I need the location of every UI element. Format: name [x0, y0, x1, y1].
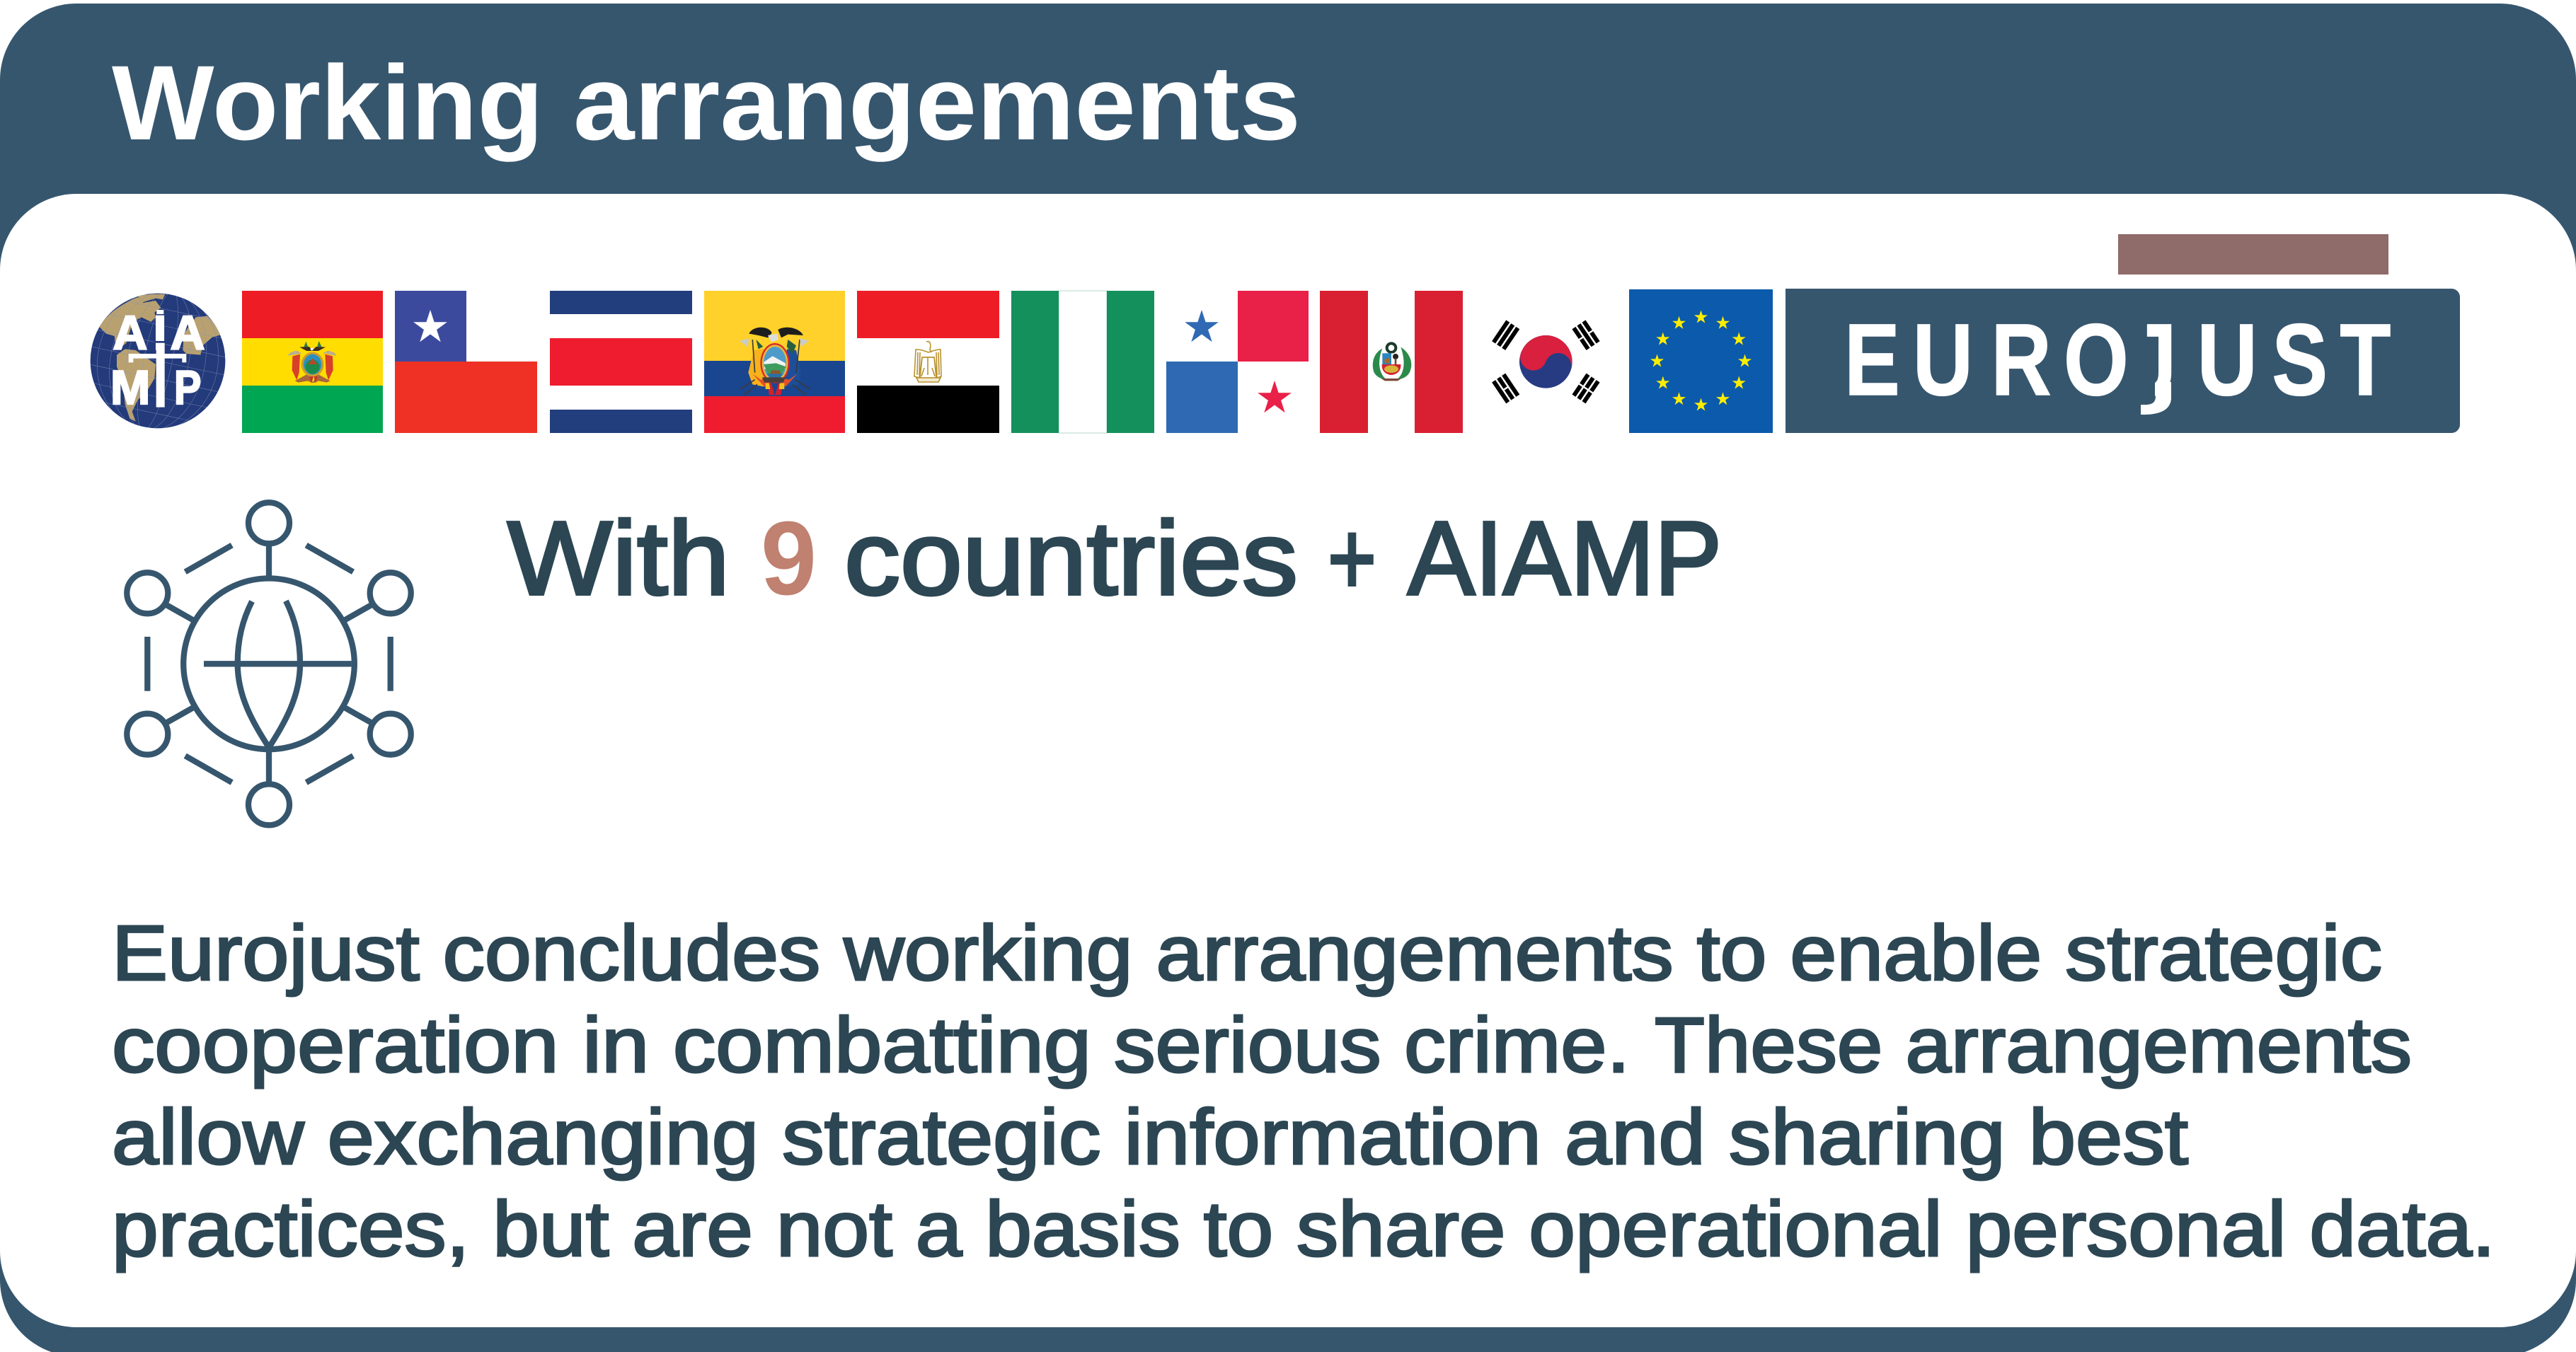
- body text: allow exchanging strategic information and sharing best: [112, 1094, 2188, 1181]
- logo letters: AIA: [113, 306, 205, 359]
- flag: Panama: [1166, 291, 1309, 433]
- emblem: Peru: [1373, 343, 1411, 381]
- emblem: Bolivia: [288, 341, 336, 383]
- trigrams: [1492, 320, 1600, 403]
- logo letters: P: [174, 362, 201, 415]
- body text: cooperation in combatting: [112, 1002, 1091, 1089]
- heading: with 9 countries + AIAMP: 9: [761, 500, 817, 617]
- heading: with 9 countries + AIAMP: [507, 500, 1722, 617]
- heading: with 9 countries + AIAMP: +: [1328, 500, 1376, 617]
- body text: Eurojust concludes working arrangements to enable strategic: [112, 910, 2382, 997]
- flag: Peru: [1320, 291, 1463, 433]
- title: Working: [112, 43, 544, 162]
- emblem: Ecuador: [740, 328, 810, 396]
- body text: serious crime.: [1114, 1002, 1630, 1089]
- body text: [112, 910, 2495, 1273]
- taegeuk: [1512, 328, 1580, 395]
- emblem: Egypt eagle: [914, 342, 941, 382]
- icon: globe network: [127, 502, 411, 825]
- title: arrangements: [573, 43, 1301, 162]
- heading: with 9 countries + AIAMP: With: [507, 500, 730, 617]
- logo letters: M: [110, 362, 150, 415]
- title: [112, 43, 1301, 162]
- body text: These arrangements: [1655, 1002, 2412, 1089]
- heading: with 9 countries + AIAMP: AIAMP: [1408, 500, 1722, 617]
- heading: with 9 countries + AIAMP: countries: [844, 500, 1298, 617]
- accent bar: [2118, 234, 2388, 275]
- logo: Eurojust: [1786, 289, 2460, 433]
- flag: South Korea: [1492, 320, 1600, 403]
- logo letters: [110, 306, 205, 415]
- flag: Ecuador: [704, 291, 845, 433]
- flag: European Union: [1629, 289, 1773, 433]
- flag: Costa Rica: [550, 291, 692, 433]
- flag: Bolivia: [242, 291, 383, 433]
- flag: Chile: [395, 291, 537, 433]
- logo: AIAMP: [91, 293, 225, 429]
- logo wordmark: EUROJUST: [1844, 303, 2391, 417]
- flag: Nigeria: [1011, 291, 1154, 433]
- flag: Egypt: [857, 291, 999, 433]
- body text: practices, but are not a basis to share operational personal data.: [112, 1186, 2495, 1273]
